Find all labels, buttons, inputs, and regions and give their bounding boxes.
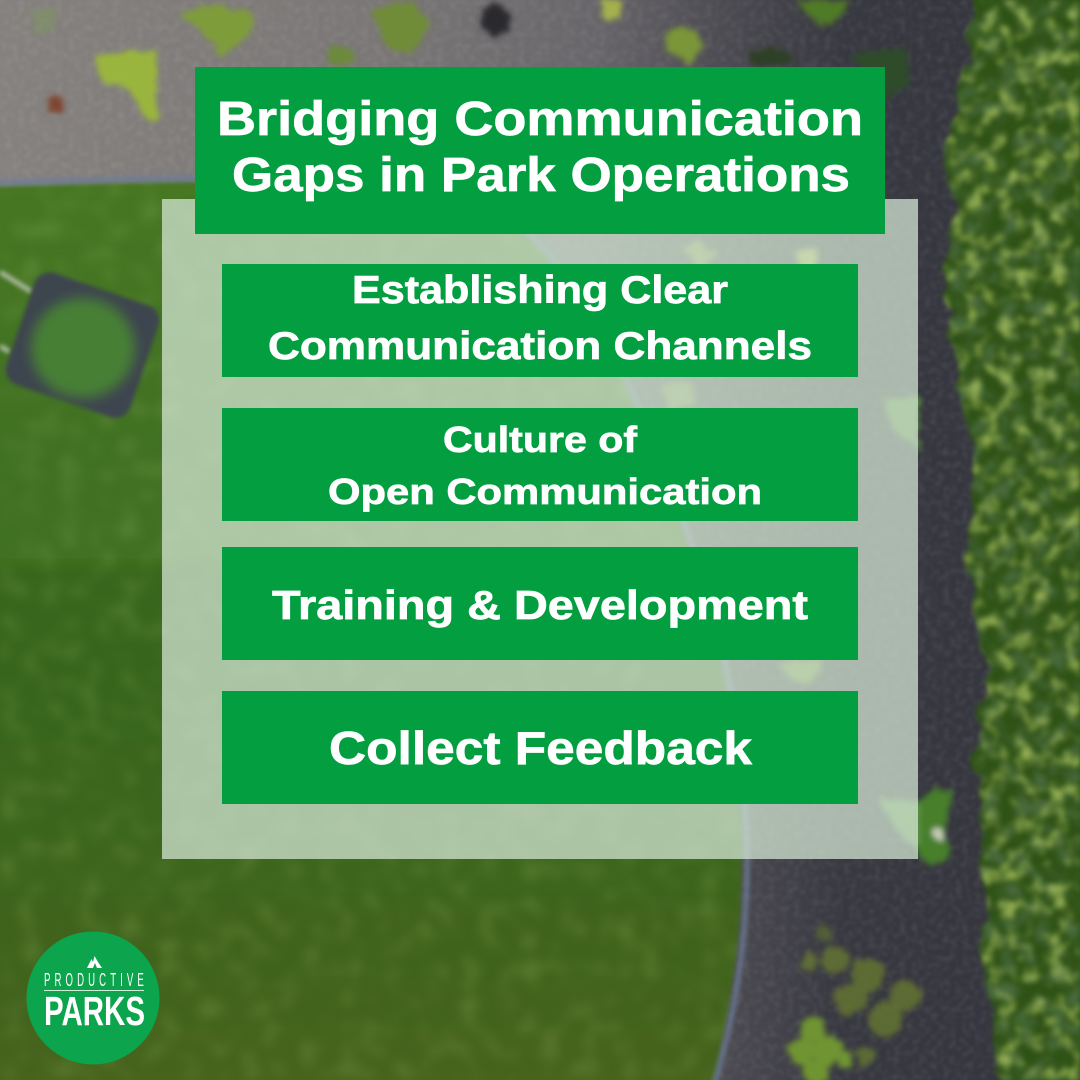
item: culture of open communication: Open Communication: [328, 471, 762, 512]
item: establishing clear communication channels: Establishing Clear: [352, 269, 728, 312]
item: training and development: [222, 547, 858, 660]
title banner: [195, 67, 885, 234]
item: establishing clear communication channels: [222, 264, 858, 377]
logo: productive parks: PRODUCTIVE: [44, 971, 144, 991]
hedge: [940, 0, 1080, 1080]
item: establishing clear communication channels: Communication Channels: [268, 325, 812, 368]
lawn: [0, 180, 744, 1080]
translucent content panel: [162, 199, 918, 859]
lawn edging: [0, 178, 747, 1080]
title text: [217, 93, 863, 202]
item: collect feedback: [222, 691, 858, 804]
icon: trees: [87, 956, 102, 968]
logo: productive parks: [26, 932, 160, 1064]
logo: productive parks: PARKS: [44, 988, 145, 1034]
item: culture of open communication: [222, 408, 858, 521]
wheelbarrow: [0, 268, 164, 422]
item: culture of open communication: Culture of: [443, 419, 638, 460]
item: collect feedback: Collect Feedback: [329, 722, 752, 774]
title text: Gaps in Park Operations: [232, 149, 850, 202]
title text: Bridging Communication: [217, 93, 863, 146]
item: training and development: Training & Development: [272, 582, 808, 628]
